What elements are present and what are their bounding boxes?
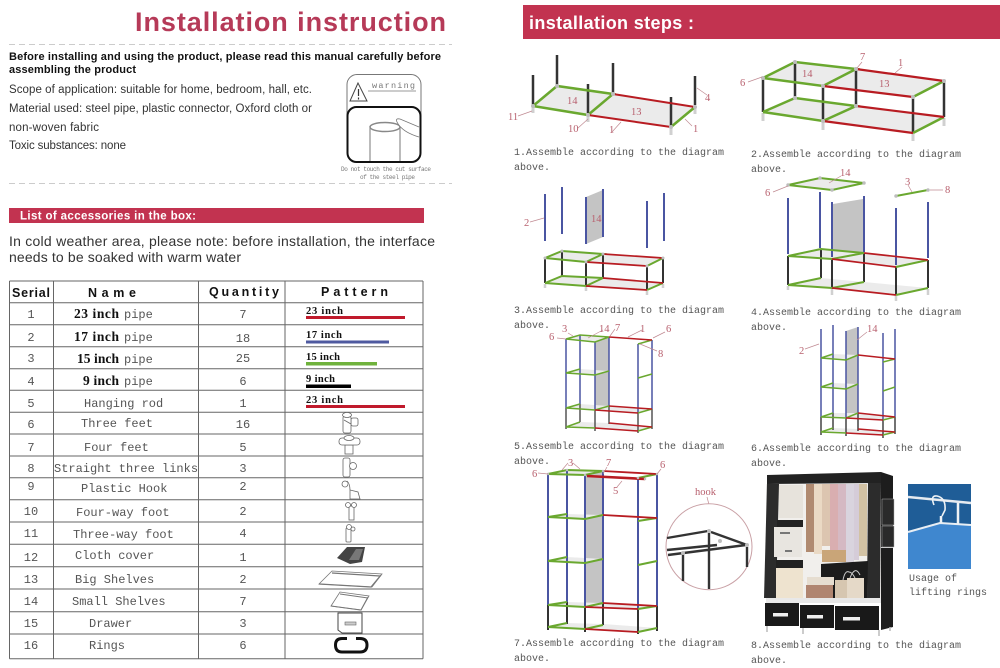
item names: pipe [124,331,153,345]
item names: Three feet [81,417,153,431]
step 1 diagram and caption: above. [514,162,550,174]
step 5 diagram and caption: 6 [666,324,671,335]
serial numbers: 13 [24,573,38,587]
step 8 wardrobe photo and caption [751,472,961,667]
table header: Quantity [209,285,279,299]
step 5 diagram and caption: above. [514,456,550,468]
serial numbers: 11 [24,527,38,541]
icon: warning do not touch cut pipe: Do not touch the cut surface [341,166,431,173]
notice text block: Material used: steel pipe, plastic connector, Oxford cloth or [9,103,312,115]
pattern: pipe length bars: 23 inch [306,395,343,406]
step 1 diagram and caption: 1 [609,125,614,136]
cold weather note [9,233,435,265]
item names: Rings [89,639,125,653]
table header [12,285,388,300]
accessories table [10,281,423,659]
step 4 diagram and caption: 8 [945,185,950,196]
step 4 diagram and caption: 3 [905,177,910,188]
item names [54,306,198,653]
step 6 diagram and caption: above. [751,458,787,470]
step 1 diagram and caption: 1.Assemble according to the diagram [514,147,724,159]
lifting ring photo and caption [908,484,987,599]
step 6 diagram and caption: 14 [867,324,878,335]
cold weather note: needs to be soaked with warm water [9,249,241,265]
pattern: pipe length bars [306,306,405,408]
step 4 diagram and caption: above. [751,322,787,334]
notice text block [9,51,441,152]
item names: pipe [124,353,153,367]
step 5 diagram and caption [514,323,724,468]
icon: three-way foot [346,524,355,542]
table header: Name [88,286,136,300]
item names: pipe [124,375,153,389]
pattern: pipe length bars: 23 inch [306,306,343,317]
step 3 diagram and caption: above. [514,320,550,332]
serial numbers: 7 [27,441,35,455]
quantities: 1 [239,551,247,565]
serial numbers: 3 [27,352,35,366]
item names: 9 inch [83,373,119,388]
step 2 diagram and caption: 2.Assemble according to the diagram [751,149,961,161]
quantities: 6 [239,375,247,389]
quantities: 25 [236,352,250,366]
step 7 diagram and caption: hook [695,487,717,498]
heading: accessories bar [9,208,424,223]
step 6 diagram and caption [751,324,961,470]
step 7 diagram and caption: 5 [613,486,618,497]
icon: straight three links [343,458,356,477]
step 4 diagram and caption [751,168,961,334]
quantities: 2 [239,480,247,494]
step 5 diagram and caption: 7 [615,323,620,334]
step 5 diagram and caption: 8 [658,349,663,360]
icon: warning do not touch cut pipe: of the steel pipe [360,174,415,181]
step 5 diagram and caption: 1 [640,324,645,335]
step 3 diagram and caption: 3.Assemble according to the diagram [514,305,724,317]
quantities: 2 [239,505,247,519]
step 1 diagram and caption: 13 [631,107,642,118]
step 3 diagram and caption [514,187,724,332]
item names: pipe [124,308,153,322]
step 7 diagram and caption: 6 [660,460,665,471]
quantities: 18 [236,332,250,346]
step 2 diagram and caption: 13 [879,79,890,90]
item names: Plastic Hook [81,482,167,496]
heading: installation steps [523,5,1000,39]
item names: Hanging rod [84,397,163,411]
hook detail circle [666,504,752,590]
item names: 17 inch [74,329,119,344]
step 2 diagram and caption: 1 [898,58,903,69]
quantities: 5 [239,441,247,455]
quantities: 16 [236,418,250,432]
item names: Big Shelves [75,573,154,587]
icon: plastic hook [342,481,360,499]
icon: big shelf [319,571,382,587]
step 3 diagram and caption: 2 [524,218,529,229]
item names: Straight three links [54,462,198,476]
quantities: 7 [239,308,247,322]
step 1 diagram and caption: 11 [508,112,518,123]
serial numbers: 6 [27,418,35,432]
step 4 diagram and caption: 14 [840,168,851,179]
serial numbers: 15 [24,617,38,631]
serial numbers: 12 [24,551,38,565]
step 1 diagram and caption: 10 [568,124,578,135]
step 4 diagram and caption: 4.Assemble according to the diagram [751,307,961,319]
quantities: 4 [239,527,247,541]
step 4 diagram and caption: 6 [765,188,770,199]
pattern: pipe length bars: 17 inch [306,330,342,341]
quantities: 7 [239,595,247,609]
lifting ring photo and caption: Usage of [909,573,957,585]
icon: cloth cover [337,547,365,564]
step 1 diagram and caption: 1 [693,124,698,135]
quantities: 6 [239,639,247,653]
heading: installation steps: installation steps : [529,13,694,33]
item names: Four feet [84,441,149,455]
step 1 diagram and caption: 14 [567,96,578,107]
step 3 diagram and caption: 14 [591,214,602,225]
notice text block: Scope of application: suitable for home, bedroom, hall, etc. [9,84,312,96]
step 2 diagram and caption: above. [751,164,787,176]
step 1 diagram and caption [508,55,724,174]
step 6 diagram and caption: 6.Assemble according to the diagram [751,443,961,455]
icon: three feet [342,412,358,433]
step 5 diagram and caption: 3 [562,324,567,335]
serial numbers: 8 [27,462,35,476]
step 2 diagram and caption: 14 [802,69,813,80]
step 8 wardrobe photo and caption: 8.Assemble according to the diagram [751,640,961,652]
serial numbers: 10 [24,505,38,519]
step 7 diagram and caption [514,458,724,665]
heading: accessories bar: List of accessories in the box: [20,210,196,222]
notice text block: Toxic substances: none [9,140,126,152]
icon: four-way foot [346,502,356,520]
step 7 diagram and caption: 7.Assemble according to the diagram [514,638,724,650]
title: Installation instruction [135,7,446,37]
step 1 diagram and caption: 4 [705,93,711,104]
item names: Small Shelves [72,595,166,609]
pattern: pipe length bars: 9 inch [306,374,335,385]
item names: 15 inch [77,351,119,366]
step 8 wardrobe photo and caption: above. [751,655,787,667]
quantities: 3 [239,462,247,476]
serial numbers [24,308,38,653]
item names: Drawer [89,617,132,631]
icon: warning do not touch cut pipe [341,74,431,181]
quantities: 1 [239,397,247,411]
step 7 diagram and caption: 7 [606,458,611,469]
item names: Three-way foot [73,528,174,542]
step 5 diagram and caption: 6 [549,332,554,343]
table header: Pattern [321,285,388,299]
serial numbers: 9 [27,480,35,494]
step 5 diagram and caption: 14 [599,324,610,335]
icon: four feet [339,436,360,454]
notice text block: non-woven fabric [9,122,99,134]
icon: warning do not touch cut pipe: warning [372,81,415,91]
table header: Serial [12,286,50,300]
item names: Cloth cover [75,549,154,563]
item names: Four-way foot [76,506,170,520]
pattern: pipe length bars: 15 inch [306,352,340,363]
quantities [236,308,250,653]
step 2 diagram and caption [740,52,961,176]
step 2 diagram and caption: 6 [740,78,745,89]
item names: 23 inch [74,306,119,321]
step 5 diagram and caption: 5.Assemble according to the diagram [514,441,724,453]
lifting ring photo and caption: lifting rings [909,587,987,599]
quantities: 3 [239,617,247,631]
step 7 diagram and caption: 6 [532,469,537,480]
quantities: 2 [239,573,247,587]
serial numbers: 16 [24,639,38,653]
serial numbers: 5 [27,397,35,411]
cold weather note: In cold weather area, please note: before installation, the interface [9,233,435,249]
serial numbers: 1 [27,308,35,322]
step 7 diagram and caption: 3 [568,458,573,469]
step 7 diagram and caption: above. [514,653,550,665]
notice text block: Before installing and using the product, please read this manual carefully before [9,51,441,63]
step 6 diagram and caption: 2 [799,346,804,357]
notice text block: assembling the product [9,64,136,76]
step 2 diagram and caption: 7 [860,52,865,63]
serial numbers: 14 [24,595,38,609]
serial numbers: 2 [27,331,35,345]
icon: small shelf [331,592,369,610]
icon: drawer [338,613,362,633]
serial numbers: 4 [27,375,35,389]
icon: ring [336,638,367,652]
